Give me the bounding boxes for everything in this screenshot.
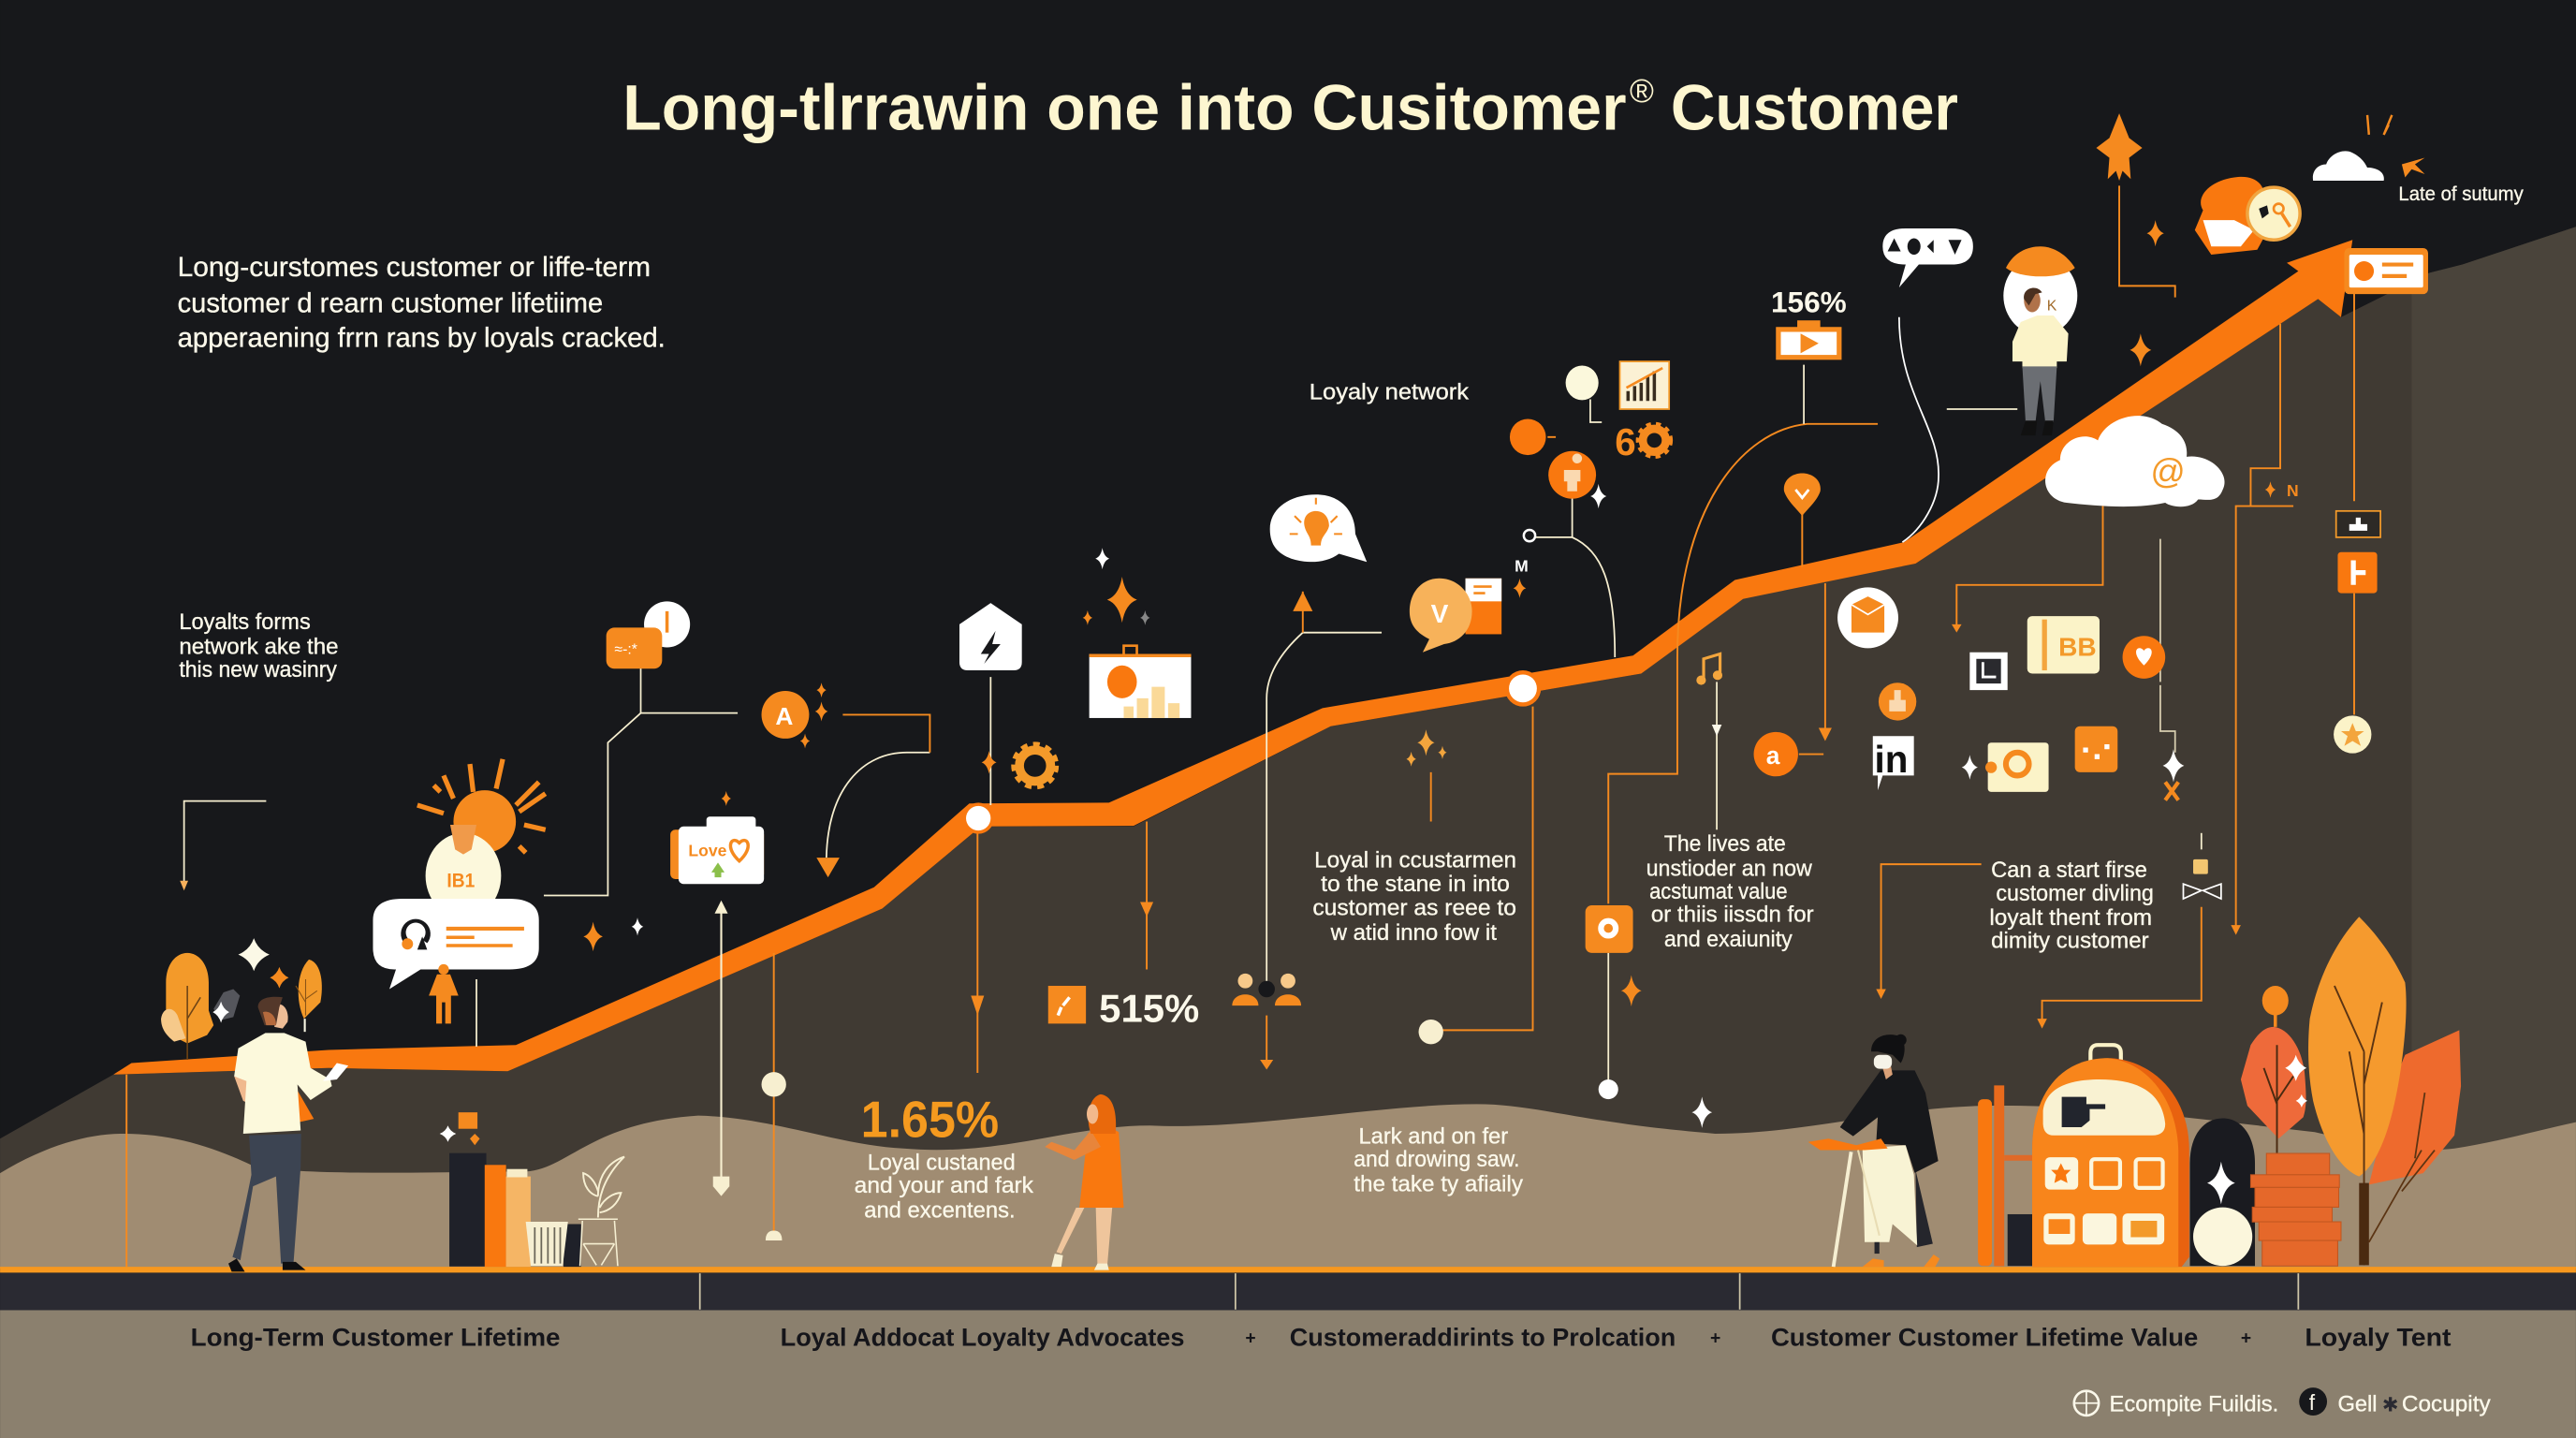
intro text: apperaening frrn rans by loyals cracked. [178,322,666,353]
icon: gear [1014,744,1057,787]
icon: small cloud [2313,151,2384,181]
icon: box circle [1837,587,1898,648]
text: loyal block: w atid inno fow it [1330,921,1497,946]
footer dark band [0,1272,2576,1310]
trees right [2241,917,2461,1265]
text: loyal block: to the stane in into [1321,873,1510,897]
icon: small orange arrow [2402,157,2424,178]
speech bubble profile [373,899,539,990]
stage labels: + [1710,1329,1720,1349]
icon: video camera [1776,320,1841,360]
small grey shape [212,990,240,1023]
icon: in tile [1873,736,1914,790]
text: loyal block: customer as reee to [1312,897,1516,921]
left note [179,610,339,682]
icon: orange blob and magnifier [2195,177,2300,255]
icon: person circle [1548,451,1596,499]
footer credits: Ecompite Fuildis. [2110,1393,2278,1417]
icon: love card [670,816,764,884]
connector lines [126,185,2354,1267]
cream ball and star [2193,1162,2252,1266]
icon: at circle [1754,732,1798,776]
stage labels: Customer Customer Lifetime Value [1771,1322,2198,1351]
props: plant on stool [578,1157,624,1266]
icon: orange dot [1510,419,1546,455]
icon: orange ticks [2367,115,2392,135]
stat 1.65%: 1.65% [861,1091,999,1148]
text: lark block: the take ty afiaily [1354,1172,1523,1196]
footer credits [2074,1387,2491,1417]
icon: at circle: a [1766,741,1780,770]
icon: 60 gear: 6 [1615,420,1636,463]
icon: chart card [1090,646,1191,718]
icon: square tile [1048,986,1086,1023]
text: lives block: and exaiunity [1664,928,1793,952]
icon: V bubble and card [1410,579,1501,653]
text: stat caption: and your and fark [855,1174,1033,1198]
icon: chat pair [607,601,690,668]
footer tan band [0,1310,2576,1438]
long white arrow [713,901,729,1196]
icon: cream dot [1566,365,1599,400]
tree left large [161,953,213,1060]
stage labels: + [2241,1329,2251,1349]
text: loyal block [1312,849,1516,946]
icon: N spark label: N [2287,481,2299,500]
tree left small [296,960,322,1032]
text: lark block: and drowing saw. [1354,1148,1519,1172]
props: orange square and diamond [459,1112,480,1145]
icon: dots bubble [1882,228,1973,287]
ground line [0,1267,2576,1272]
arrowheads [180,592,2241,1070]
icon: dots tile [2075,726,2117,772]
woman with mask [1808,1034,1939,1267]
text: start block: dimity customer [1991,930,2149,954]
footer credits: Cocupity [2402,1393,2491,1417]
text: stat caption [855,1152,1033,1223]
band dividers [700,1273,2298,1310]
sun icon [417,759,546,853]
right terrain shade [2411,227,2576,1269]
icon: orange A circle: A [775,702,793,730]
icon: orange x [2165,782,2178,800]
icon: BB card: BB [2058,632,2097,661]
title: ® [1630,73,1654,110]
text: lives block: or thiis iissdn for [1651,903,1814,928]
icon: chat pair: ≈-:* [614,642,637,658]
footer credits: ✱ [2382,1395,2398,1416]
text: stat caption: Loyal custaned [868,1152,1016,1176]
icon: ring card [1985,742,2049,792]
small orange person [429,964,459,1023]
profile badge: IB1 [446,871,476,892]
text: lives block: unstioder an now [1647,857,1813,881]
stat 515%: 515% [1099,987,1199,1031]
intro text [178,252,666,353]
text: lives block: The lives ate [1664,832,1786,857]
icon: people [1232,974,1301,1005]
icon: heart circle [2123,636,2165,679]
left note: network ake the [179,636,339,660]
text: lark block [1354,1124,1523,1196]
intro text: Long-curstomes customer or liffe-term [178,252,651,283]
stage labels: Loyal Addocat Loyalty Advocates [781,1322,1184,1351]
icon: 60 gear [1615,420,1671,463]
footer credits: f [2309,1390,2316,1415]
text: start block: loyalt thent from [1989,906,2152,931]
text: lives block [1647,832,1814,952]
icon: bow [2183,859,2221,899]
footer credits: Gell [2337,1393,2378,1417]
black arch [2190,1118,2255,1266]
props: books [449,1153,531,1267]
icon: M glyph: M [1515,557,1529,576]
icon: gear tile [1586,905,1633,953]
stage labels: Customeraddirints to Prolcation [1290,1322,1676,1351]
man with phone [228,997,348,1271]
woman in orange dress [1045,1094,1123,1270]
stage labels: + [1245,1329,1256,1349]
icon: BB card [2027,616,2100,674]
props: bin [526,1222,581,1267]
nodes [762,530,1618,1240]
text: lark block: Lark and on fer [1358,1124,1508,1149]
backpack [2032,1045,2189,1267]
intro text: customer d rearn customer lifetiime [178,287,603,318]
icon: outlined tile [2336,511,2380,537]
brown terrain [0,227,2576,1269]
text: start block [1989,858,2154,954]
icon: id card at arrow tip [2344,248,2428,294]
icon: orange A circle [762,691,809,739]
bricks [2250,1153,2341,1266]
network label: Loyaly network [1310,380,1469,404]
stage labels: Loyaly Tent [2305,1322,2452,1351]
text: lives block: acstumat value [1649,880,1788,904]
stage labels [191,1322,2452,1351]
text: stat caption: and excentens. [864,1198,1016,1223]
red frame [1978,1085,2032,1266]
title: Long-tlrrawin one into Cusitomer [622,72,1627,144]
sparkle stars [239,220,2276,1142]
left note: this new wasinry [179,658,337,682]
icon: big cloud [2045,416,2225,506]
icon: rocket [2096,113,2143,181]
icon: growth chart card [1620,361,1669,409]
icon: orange tile [2337,552,2378,594]
text: loyal block: Loyal in ccustarmen [1314,849,1516,873]
left note: Loyalts forms [179,610,311,635]
icon: house with bolt [959,603,1022,670]
icon: orange person circle [1879,682,1916,721]
icon: L tile [1969,653,2008,690]
icon: love card: Love [688,841,727,859]
icon: big cloud: @ [2150,452,2186,491]
icon: in tile: in [1875,738,1908,781]
profile badge [426,825,501,918]
top right label: Late of sutumy [2398,183,2524,205]
person on arrow [2003,246,2077,435]
person on arrow: K [2047,299,2057,315]
icon: bulb bubble [1270,494,1367,562]
tan hills [0,1104,2576,1269]
icon: orange pin [1784,473,1821,516]
stage labels: Long-Term Customer Lifetime [191,1322,561,1351]
growth arrow [113,240,2352,1075]
icon: music note [1698,654,1720,683]
icon: star circle [2334,715,2371,754]
stat 156%: 156% [1771,285,1847,318]
text: start block: customer divling [1996,882,2154,906]
text: start block: Can a start firse [1991,858,2147,883]
title: Customer [1671,72,1958,144]
icon: V bubble and card: V [1431,599,1449,628]
